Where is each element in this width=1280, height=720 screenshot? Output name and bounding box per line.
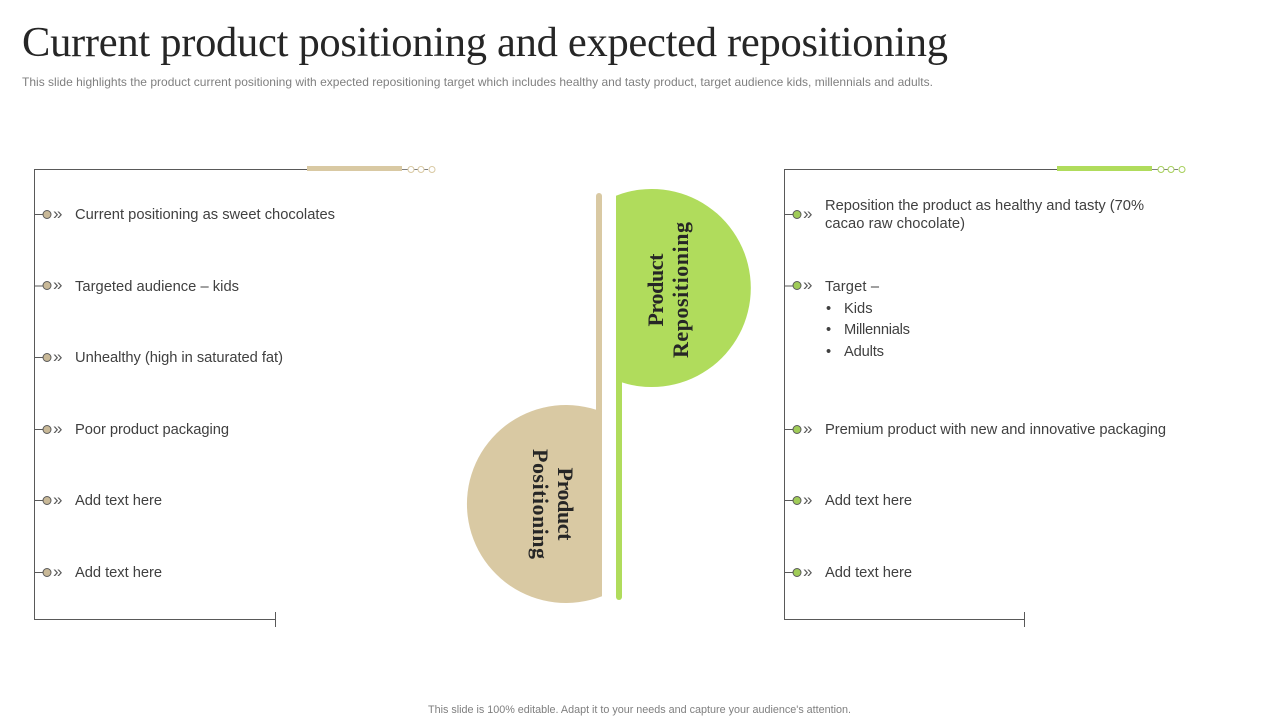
semicircle: green xyxy=(616,189,751,387)
panel: current positioning list xyxy=(34,166,435,627)
accent bar: tan xyxy=(307,166,402,171)
footer note: This slide is 100% editable. Adapt it to your needs and capture your audience's attention. xyxy=(428,704,851,716)
text: expected repositioning items: Adults xyxy=(844,344,884,360)
heading: product positioning: Positioning xyxy=(528,449,553,559)
text: current positioning items: Add text here xyxy=(75,493,162,509)
heading: product positioning xyxy=(528,449,578,559)
accent bar: green xyxy=(1057,166,1152,171)
text: expected repositioning items: Target – xyxy=(825,279,880,295)
text: expected repositioning items: Add text here xyxy=(825,565,912,581)
text: expected repositioning items: • xyxy=(826,301,831,317)
bullet markers: tan: » xyxy=(53,275,62,294)
text: expected repositioning items: • xyxy=(826,344,831,360)
text: current positioning items: Unhealthy (high in saturated fat) xyxy=(75,350,283,366)
semicircle: tan xyxy=(467,405,602,603)
decorative dots: tan xyxy=(408,166,435,172)
bar: green xyxy=(616,370,622,600)
bullet markers: tan: » xyxy=(53,562,62,581)
bullet markers: green xyxy=(785,204,812,581)
panel frame: right xyxy=(784,170,1178,627)
text: current positioning items: Poor product packaging xyxy=(75,422,229,438)
bullet markers: tan: » xyxy=(53,204,62,223)
text: current positioning items: Targeted audience – kids xyxy=(75,279,239,295)
heading: product repositioning: Product xyxy=(643,253,668,326)
panel: expected repositioning list xyxy=(784,166,1185,627)
title: Current product positioning and expected repositioning xyxy=(22,19,948,66)
bullet markers: green: » xyxy=(803,275,812,294)
bullet markers: green: » xyxy=(803,419,812,438)
bullet markers: green: » xyxy=(803,562,812,581)
bullet markers: tan: » xyxy=(53,419,62,438)
center graphic: product repositioning xyxy=(616,189,751,600)
bullet markers: tan: » xyxy=(53,490,62,509)
bullet markers: green: » xyxy=(803,204,812,223)
text: expected repositioning items: • xyxy=(826,322,831,338)
bullet markers: tan: » xyxy=(53,347,62,366)
text: current positioning items: Add text here xyxy=(75,565,162,581)
center graphic: product positioning xyxy=(467,193,602,603)
heading: product repositioning: Repositioning xyxy=(668,222,693,358)
decorative dots: green xyxy=(1158,166,1185,172)
text: expected repositioning items: Add text here xyxy=(825,493,912,509)
bar: tan xyxy=(596,193,602,418)
subtitle: This slide highlights the product current positioning with expected repositioning target which includes healthy and tasty product, target audience kids, millennials and adults. xyxy=(22,75,933,89)
text: expected repositioning items: Reposition the product as healthy and tasty (70% xyxy=(825,198,1144,214)
bullet markers: tan xyxy=(35,204,62,581)
text: expected repositioning items: Premium product with new and innovative packaging xyxy=(825,422,1166,438)
text: current positioning items: Current positioning as sweet chocolates xyxy=(75,207,335,223)
text: expected repositioning items: Millennials xyxy=(844,322,910,338)
heading: product repositioning xyxy=(643,222,693,358)
text: expected repositioning items: Kids xyxy=(844,301,873,317)
text: expected repositioning items xyxy=(825,198,1166,581)
text: current positioning items xyxy=(75,207,335,581)
heading: product positioning: Product xyxy=(553,468,578,541)
text: expected repositioning items: cacao raw chocolate) xyxy=(825,216,965,232)
bullet markers: green: » xyxy=(803,490,812,509)
panel frame: left xyxy=(34,170,428,627)
